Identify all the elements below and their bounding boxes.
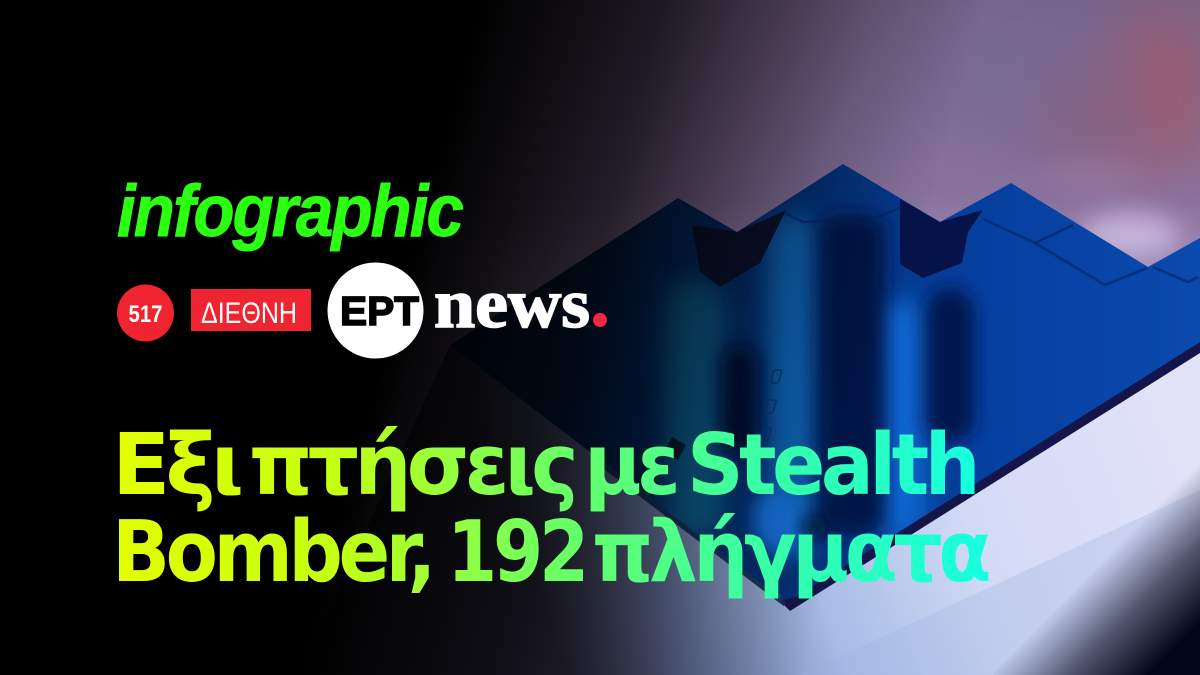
- logo: ΕΡΤ news: news: [434, 266, 590, 343]
- left vent: [666, 437, 686, 460]
- corner shadow: [992, 463, 1200, 675]
- label: infographic: infographic: [117, 171, 463, 252]
- dark intake right: [900, 199, 983, 278]
- title: [112, 416, 988, 602]
- logo: ΕΡΤ news: [328, 262, 607, 358]
- panel lines: [983, 219, 1147, 285]
- title: Bomber,: [112, 503, 432, 602]
- tag: ΔΙΕΘΝΗ: [191, 289, 311, 331]
- dark shadows: [819, 215, 885, 535]
- tag: ΔΙΕΘΝΗ: ΔΙΕΘΝΗ: [201, 297, 297, 330]
- title: πτήσεις: [249, 416, 574, 515]
- lit engine humps: [665, 280, 723, 540]
- title: με: [584, 416, 676, 515]
- background: ground below aircraft: [300, 340, 1200, 675]
- title: 192: [447, 503, 585, 602]
- trailing edge: [780, 342, 1200, 611]
- badge: 517: [117, 284, 174, 342]
- badge: 517: 517: [128, 301, 162, 328]
- nozzle disc: [754, 488, 802, 552]
- small panels: [760, 370, 782, 441]
- title: Stealth: [687, 416, 976, 515]
- illustration: stealth bomber: [450, 164, 1200, 611]
- dark intake left: [692, 210, 786, 287]
- logo: ΕΡΤ news: ΕΡΤ: [340, 288, 419, 334]
- title: Εξι: [112, 416, 241, 515]
- title: πλήγματα: [592, 503, 988, 602]
